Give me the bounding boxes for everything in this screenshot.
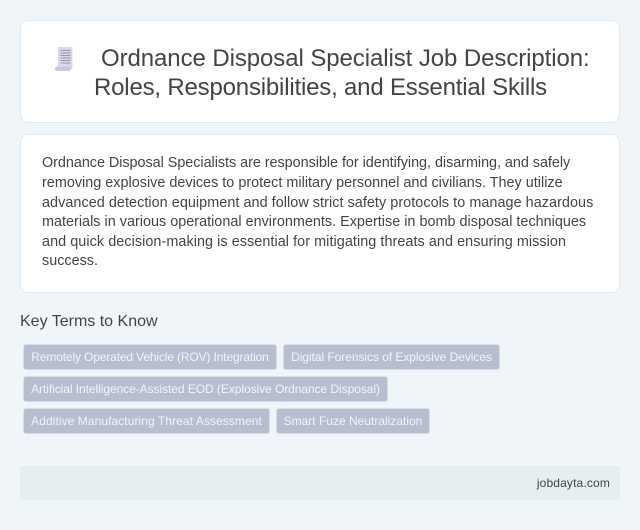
chip: additive manufacturing: [23, 408, 270, 434]
description text: Ordnance Disposal Specialists are responsible for identifying, disarming, and safely: [42, 155, 570, 171]
chip: additive manufacturing: Additive Manufacturing Threat Assessment: [31, 414, 262, 428]
chip: digital forensics: Digital Forensics of Explosive Devices: [291, 350, 492, 364]
title: Ordnance Disposal Specialist Job Description:: [101, 45, 590, 72]
icon: document scroll: [55, 47, 72, 71]
heading: key terms: Key Terms to Know: [20, 313, 158, 330]
title: [94, 45, 590, 101]
description text: removing explosive devices to protect military personnel and civilians. They utilize: [42, 175, 563, 191]
header panel: [20, 20, 620, 123]
description text: advanced detection equipment and follow strict safety protocols to manage hazardous: [42, 195, 593, 211]
description text: materials in various operational environments. Expertise in bomb disposal techniques: [42, 214, 586, 230]
chip: smart fuze: [276, 408, 430, 434]
description text: [42, 155, 593, 269]
title: Roles, Responsibilities, and Essential Skills: [94, 74, 547, 101]
chip: smart fuze: Smart Fuze Neutralization: [284, 414, 422, 428]
footer bar: [20, 466, 620, 500]
chip: AI-assisted EOD: Artificial Intelligence-Assisted EOD (Explosive Ordnance Disposal): [31, 382, 380, 396]
chip: digital forensics: [283, 344, 500, 370]
description text: and quick decision-making is essential for mitigating threats and ensuring mission: [42, 234, 566, 250]
chip: ROV integration: Remotely Operated Vehicle (ROV) Integration: [31, 350, 269, 364]
key terms chips: [23, 344, 500, 434]
chip: ROV integration: [23, 344, 277, 370]
footer source: jobdayta.com: [537, 476, 610, 490]
chip: AI-assisted EOD: [23, 376, 388, 402]
description panel: [20, 134, 620, 293]
description text: success.: [42, 253, 98, 269]
